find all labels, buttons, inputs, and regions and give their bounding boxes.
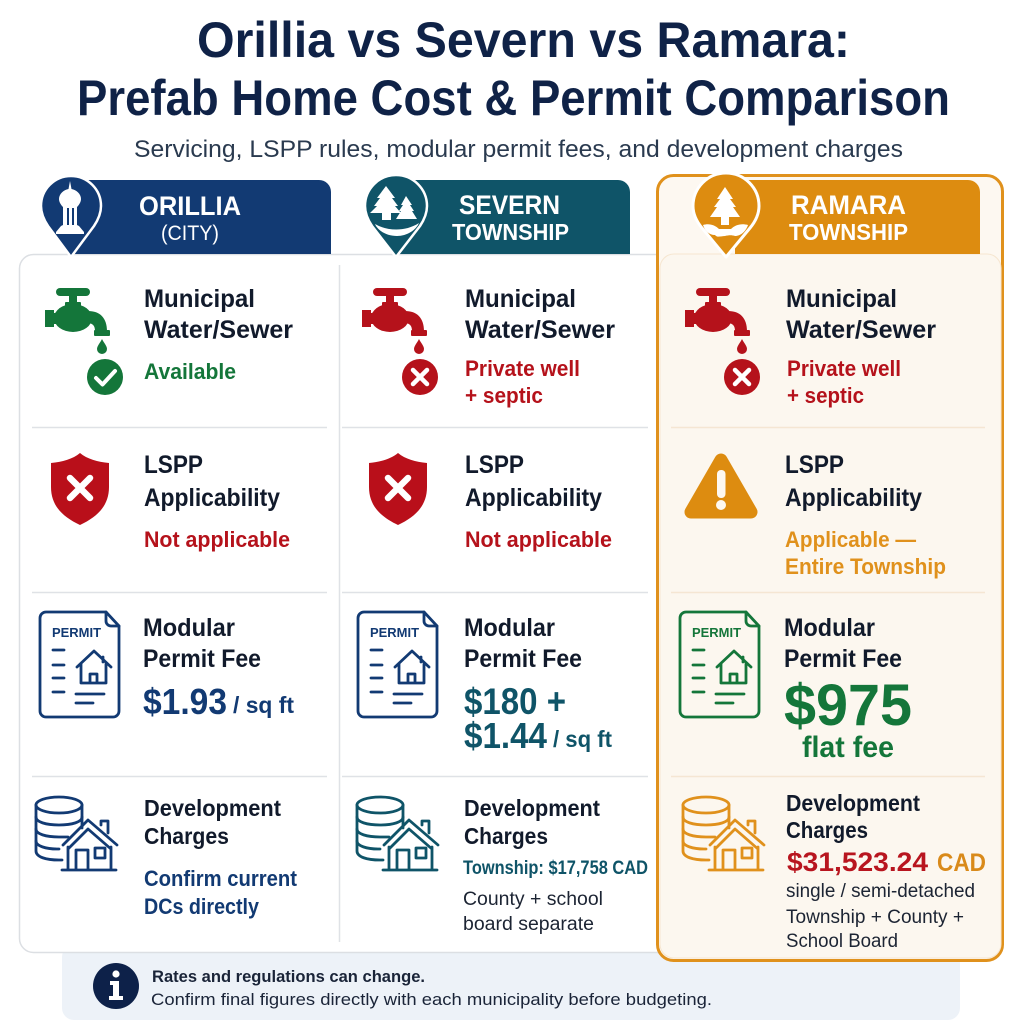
row: lspp: Applicability <box>785 484 922 512</box>
note text <box>151 968 712 1009</box>
row: water: Available <box>144 359 236 384</box>
panel: severn column <box>357 175 648 935</box>
row: lspp: LSPP <box>785 451 844 479</box>
row: lspp: Applicable — <box>785 527 916 552</box>
header: ramara: RAMARA <box>791 190 906 220</box>
row: development charges <box>36 795 298 919</box>
row: lspp: Applicability <box>144 484 280 512</box>
row: permit <box>40 612 294 722</box>
row: permit: / sq ft <box>233 692 294 718</box>
row: lspp <box>369 451 612 552</box>
row: permit: $1.44 <box>464 715 547 756</box>
row: permit: $975 <box>784 673 912 738</box>
row: water: Private well <box>465 356 580 381</box>
row: development charges: Township: $17,758 CAD <box>463 857 648 879</box>
row: permit: $180 + <box>464 681 566 722</box>
row: lspp: Entire Township <box>785 554 946 579</box>
row: permit: Permit Fee <box>464 645 582 673</box>
panel: orillia column <box>36 176 331 919</box>
row: lspp: Not applicable <box>465 527 612 552</box>
panel: ramara highlight <box>658 176 1002 960</box>
row: permit: Modular <box>784 614 875 642</box>
row: permit: flat fee <box>802 731 894 764</box>
row: development charges: board separate <box>463 914 594 935</box>
icon: warning <box>691 460 751 512</box>
row: permit <box>358 612 612 756</box>
row: development charges <box>683 790 986 952</box>
header: ramara: TOWNSHIP <box>789 219 908 245</box>
row: water: Municipal <box>786 285 897 313</box>
row: permit: Modular <box>464 614 555 642</box>
row: water: Water/Sewer <box>465 316 615 344</box>
icon: info <box>93 963 139 1009</box>
row: lspp: LSPP <box>465 451 524 479</box>
row: permit <box>680 612 912 764</box>
row: development charges: Development <box>144 795 281 821</box>
note text: Rates and regulations can change. <box>152 968 425 986</box>
header: orillia: (CITY) <box>161 222 219 245</box>
header: orillia: ORILLIA <box>139 191 241 221</box>
title: Prefab Home Cost & Permit Comparison <box>77 70 950 126</box>
panel: ramara column <box>680 173 986 952</box>
row: lspp <box>691 451 946 579</box>
row: water: Municipal <box>144 285 255 313</box>
row: permit: PERMIT <box>52 625 101 640</box>
row: lspp: Applicability <box>465 484 602 512</box>
row: water: Private well <box>787 356 901 381</box>
row: water <box>362 285 615 408</box>
row: development charges: single / semi-detached <box>786 881 975 902</box>
header: orillia <box>41 176 331 257</box>
row: development charges: Development <box>786 790 920 816</box>
row: water <box>45 285 293 395</box>
row: water: + septic <box>787 383 864 408</box>
header: severn <box>365 175 630 257</box>
icon: ramara pin <box>693 173 759 257</box>
header: ramara <box>693 173 980 257</box>
row: development charges: DCs directly <box>144 894 260 919</box>
row: water <box>685 285 936 408</box>
header: severn: TOWNSHIP <box>452 219 569 245</box>
row: lspp <box>51 451 290 552</box>
row: development charges: Charges <box>464 823 548 849</box>
row: water: Water/Sewer <box>786 316 936 344</box>
title: Orillia vs Severn vs Ramara: <box>197 12 850 68</box>
row: permit: PERMIT <box>692 625 741 640</box>
row: development charges: Development <box>464 795 600 821</box>
row: development charges: $31,523.24 <box>787 847 928 877</box>
note text: Confirm final figures directly with each municipality before budgeting. <box>151 990 712 1009</box>
icon: severn pin <box>365 175 427 257</box>
row: development charges: Charges <box>144 823 229 849</box>
row: permit: / sq ft <box>553 726 612 752</box>
row: development charges: Charges <box>786 817 868 843</box>
footer note bar <box>62 945 960 1020</box>
row: water: + septic <box>465 383 543 408</box>
icon: orillia pin <box>41 176 101 257</box>
header: severn: SEVERN <box>459 190 560 220</box>
row: development charges: CAD <box>937 849 986 877</box>
row: development charges: County + school <box>463 889 603 910</box>
row: lspp: Not applicable <box>144 527 290 552</box>
row: permit: Modular <box>143 614 235 642</box>
row: development charges: Township + County + <box>786 907 964 928</box>
subtitle: Servicing, LSPP rules, modular permit fees, and development charges <box>134 136 903 163</box>
row: development charges: Confirm current <box>144 866 298 891</box>
row: permit: PERMIT <box>370 625 419 640</box>
row: lspp: LSPP <box>144 451 203 479</box>
row: water: Water/Sewer <box>144 316 293 344</box>
row: permit: $1.93 <box>143 681 227 722</box>
comparison card <box>20 254 994 952</box>
row: development charges: School Board <box>786 931 898 952</box>
panel: ramara inner card <box>660 254 1001 958</box>
title <box>77 12 950 126</box>
row: development charges <box>357 795 648 935</box>
row: water: Municipal <box>465 285 576 313</box>
row: permit: Permit Fee <box>784 645 902 673</box>
row: permit: Permit Fee <box>143 645 261 673</box>
